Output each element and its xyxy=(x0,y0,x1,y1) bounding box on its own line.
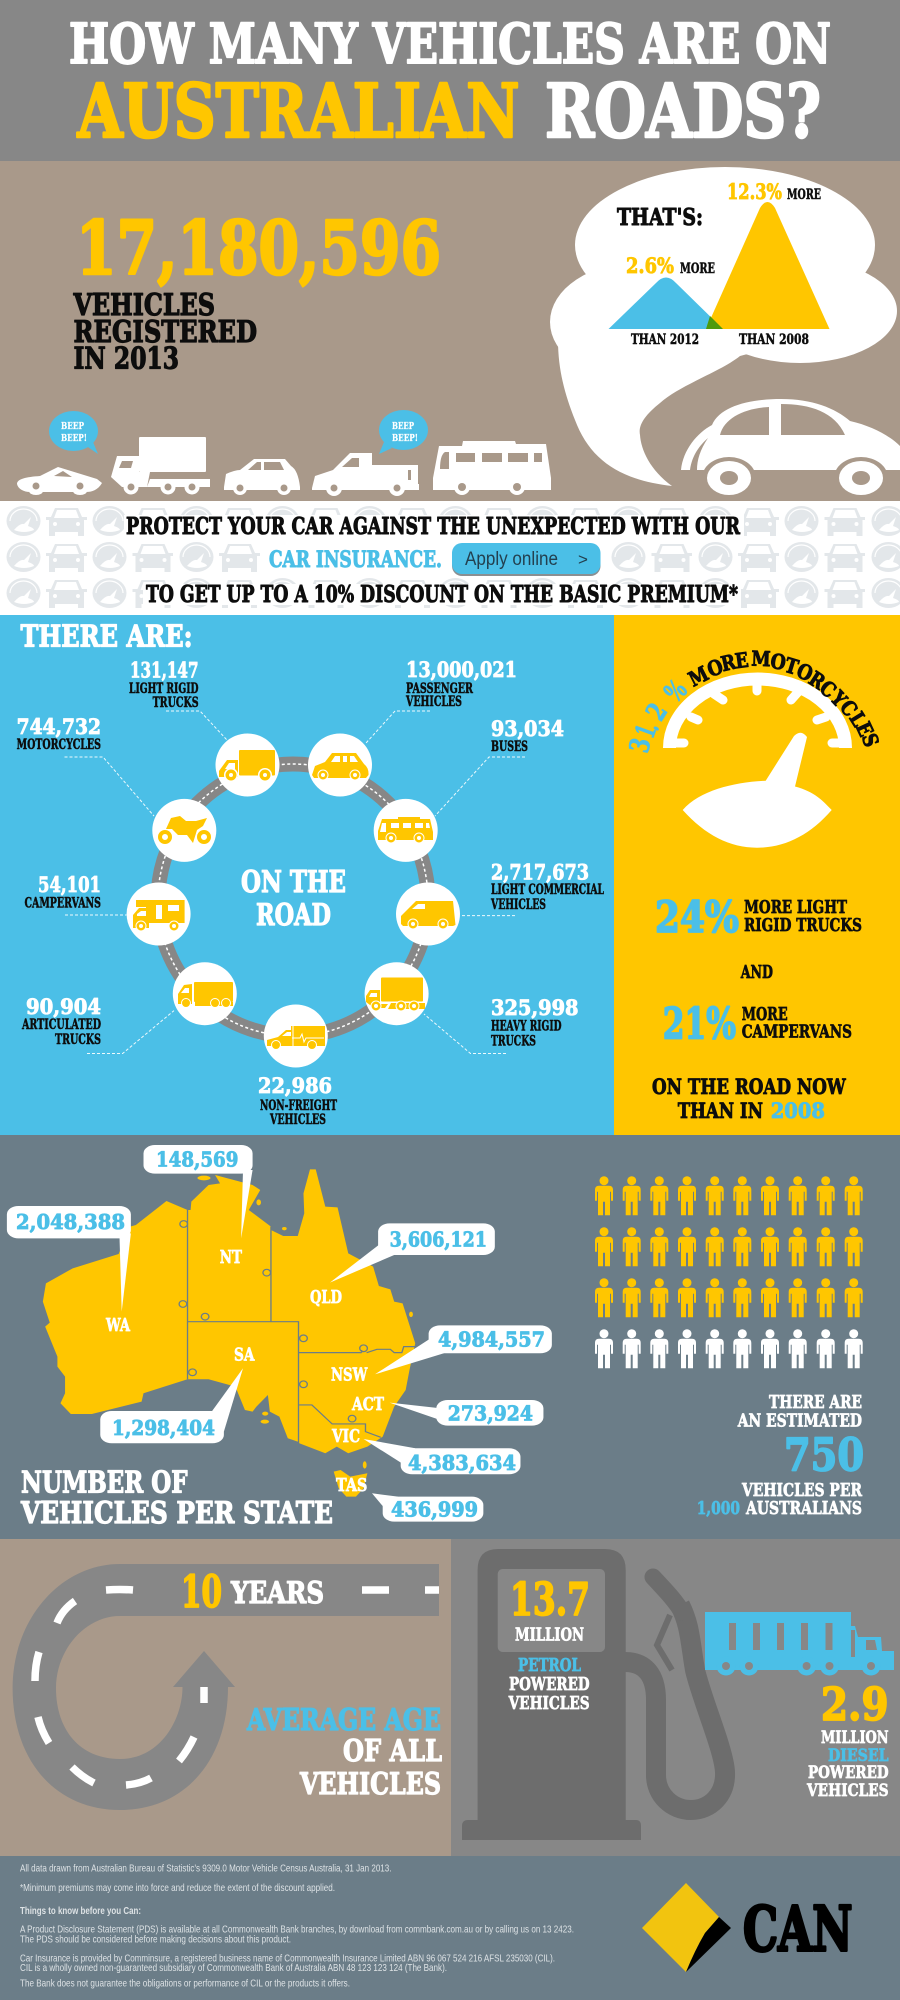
stat: 21% xyxy=(663,1000,852,1050)
big number: 17,180,596 xyxy=(76,206,441,292)
item: campervans: CAMPERVANS xyxy=(24,896,101,912)
heading: THERE ARE: xyxy=(20,620,192,654)
panel: total vehicles registered xyxy=(0,161,900,502)
item: articulated trucks xyxy=(21,962,237,1054)
pictogram: people rows xyxy=(595,1176,863,1368)
stat: 21%: 21% xyxy=(663,1000,736,1050)
2.6% more xyxy=(626,253,715,278)
panel: insurance banner xyxy=(0,501,900,615)
button: apply online: > xyxy=(578,550,588,569)
state labels: WA xyxy=(105,1315,131,1336)
curved headline: . xyxy=(635,716,666,735)
item: heavy rigid trucks: HEAVY RIGID xyxy=(491,1018,562,1034)
stat: 750 per 1,000: VEHICLES PER xyxy=(741,1481,862,1501)
curved headline: 1 xyxy=(630,721,663,742)
logo: CAN xyxy=(642,1883,852,1972)
closing line: THAN IN xyxy=(678,1098,763,1123)
state labels: TAS xyxy=(336,1475,367,1496)
state labels xyxy=(105,1247,384,1496)
curved headline: O xyxy=(793,659,816,687)
item: articulated trucks: ARTICULATED xyxy=(21,1017,101,1033)
ring road xyxy=(158,764,428,1036)
curved headline: S xyxy=(856,731,883,750)
curved headline: M xyxy=(685,662,713,692)
centre label: ROAD xyxy=(256,898,331,933)
average age caption: AVERAGE AGE xyxy=(246,1703,441,1738)
callout: QLD: 3,606,121 xyxy=(390,1228,487,1252)
item: light rigid trucks xyxy=(129,658,280,796)
callout: NT: 148,569 xyxy=(156,1148,238,1172)
state labels: VIC xyxy=(331,1426,360,1447)
caption xyxy=(73,288,257,376)
state labels: ACT xyxy=(351,1394,384,1415)
stat: 21%: CAMPERVANS xyxy=(742,1022,852,1043)
icon: sports car with beep xyxy=(17,411,102,495)
ten years: 10 xyxy=(181,1567,222,1618)
stat: 21%: MORE xyxy=(742,1004,788,1025)
item: light rigid trucks: LIGHT RIGID xyxy=(129,681,199,697)
panel: there are (on the road) xyxy=(0,615,614,1135)
caption: VEHICLES xyxy=(73,288,215,323)
item: heavy rigid trucks xyxy=(365,962,578,1054)
panel: average age xyxy=(0,1539,451,1856)
icon: truck xyxy=(111,437,210,494)
callout: VIC xyxy=(364,1439,520,1475)
12.3% more: MORE xyxy=(787,187,821,203)
axis labels xyxy=(631,332,809,348)
item: passenger vehicles xyxy=(308,657,517,796)
axis labels: THAN 2012 xyxy=(631,332,699,348)
curved headline: 3 xyxy=(623,735,657,756)
item: light rigid trucks: TRUCKS xyxy=(153,695,199,711)
item: buses xyxy=(374,716,564,862)
state labels: SA xyxy=(234,1345,255,1366)
curved headline: C xyxy=(815,676,841,703)
footnotes: The PDS should be considered before making decisions about this product. xyxy=(20,1934,291,1946)
stat: 24%: MORE LIGHT xyxy=(744,897,847,918)
item: light rigid trucks: 131,147 xyxy=(130,658,198,682)
curved headline: Y xyxy=(825,686,851,712)
item: light commercial vehicles: 2,717,673 xyxy=(491,860,589,884)
panel: footer xyxy=(0,1856,900,2000)
item: articulated trucks: 90,904 xyxy=(26,994,101,1019)
centre label xyxy=(241,865,346,933)
diesel stat xyxy=(806,1678,889,1801)
curved headline: O xyxy=(704,655,726,682)
diesel stat: DIESEL xyxy=(828,1746,889,1766)
heading: number of vehicles per state: VEHICLES PER STATE xyxy=(20,1496,333,1531)
footnotes xyxy=(20,1862,574,1990)
stat: 750 per 1,000: AUSTRALIANS xyxy=(745,1499,862,1519)
closing line: ON THE ROAD NOW xyxy=(652,1074,846,1099)
curved headline: T xyxy=(782,654,801,680)
footnotes: Car Insurance is provided by Comminsure, a registered business name of Commonwealth Insurance Limited ABN 96 067 524 216 AFSL 235030 (CIL). xyxy=(20,1952,555,1964)
item: campervans xyxy=(24,872,191,946)
icon: sports car with beep: BEEP! xyxy=(61,433,87,444)
item: buses: BUSES xyxy=(491,739,528,755)
callout: NSW xyxy=(375,1325,552,1374)
ten years: YEARS xyxy=(230,1576,324,1611)
logo: CAN: CAN xyxy=(743,1893,852,1966)
axis labels: THAN 2008 xyxy=(739,332,809,348)
state labels: NT xyxy=(220,1247,242,1268)
map of Australia xyxy=(43,1169,415,1497)
title: AUSTRALIAN xyxy=(77,69,520,155)
triangle chart xyxy=(608,202,830,329)
item: non-freight vehicles: 22,986 xyxy=(258,1073,332,1098)
item: passenger vehicles: 13,000,021 xyxy=(406,657,517,682)
2.6% more: MORE xyxy=(680,261,715,277)
curved headline: % xyxy=(659,674,693,709)
callout: WA xyxy=(7,1206,131,1312)
title xyxy=(69,11,831,155)
closing line xyxy=(652,1074,846,1123)
curved headline: E xyxy=(734,648,750,674)
item: motorcycles xyxy=(17,714,216,862)
stat: 24%: RIGID TRUCKS xyxy=(744,915,862,936)
stat: 750 per 1,000: AN ESTIMATED xyxy=(737,1412,862,1432)
item: light commercial vehicles: LIGHT COMMERCIAL xyxy=(491,882,604,898)
callout: SA: 1,298,404 xyxy=(112,1416,215,1440)
item: motorcycles: 744,732 xyxy=(17,714,101,739)
panel: growth stats xyxy=(614,615,900,1135)
footnotes: A Product Disclosure Statement (PDS) is available at all Commonwealth Bank branches, by download from commbank.com.au or by calling us on 13 2423. xyxy=(20,1924,574,1936)
petrol stat: PETROL xyxy=(518,1655,581,1676)
curved headline: C xyxy=(835,696,862,721)
closing line: 2008 xyxy=(771,1098,825,1123)
ten years xyxy=(181,1567,324,1618)
button: apply online xyxy=(452,543,600,576)
icon: pickup with beep: BEEP xyxy=(392,421,414,432)
2.6% more: 2.6% xyxy=(626,253,674,278)
item: passenger vehicles: VEHICLES xyxy=(405,694,462,710)
stat: 24%: 24% xyxy=(655,893,739,943)
icon: speedometer xyxy=(660,679,860,848)
footnotes: All data drawn from Australian Bureau of Statistic's 9309.0 Motor Vehicle Census Australia, 31 Jan 2013. xyxy=(20,1862,392,1874)
callout: TAS xyxy=(372,1493,483,1522)
car insurance: CAR INSURANCE. xyxy=(269,547,442,573)
centre label: ON THE xyxy=(241,865,346,900)
petrol stat: 13.7 xyxy=(510,1573,590,1626)
panel: vehicles per state xyxy=(0,1135,900,1539)
item: campervans: 54,101 xyxy=(38,872,101,897)
item: heavy rigid trucks: TRUCKS xyxy=(491,1034,536,1050)
callout: NT xyxy=(144,1145,253,1238)
button: apply online: Apply online xyxy=(465,549,558,570)
icon: semi truck xyxy=(705,1612,894,1676)
diesel stat: 2.9 xyxy=(821,1678,889,1731)
exhaust cloud with comparison chart xyxy=(550,167,897,486)
callout: SA xyxy=(100,1368,243,1443)
footnotes: Things to know before you Can: xyxy=(20,1905,141,1917)
heading: number of vehicles per state xyxy=(20,1466,333,1531)
caption: IN 2013 xyxy=(74,342,179,376)
that's label: THAT'S: xyxy=(617,204,703,231)
icon: pickup with beep: BEEP! xyxy=(392,433,418,444)
and: AND xyxy=(740,962,773,983)
panel: fuel types xyxy=(451,1539,900,1856)
curved headline: M xyxy=(751,647,771,672)
icon: sports car with beep: BEEP xyxy=(61,421,84,432)
callout: WA: 2,048,388 xyxy=(16,1210,125,1234)
callout: ACT: 273,924 xyxy=(448,1402,533,1426)
stat: 24% xyxy=(655,893,862,943)
caption: REGISTERED xyxy=(74,315,257,350)
heading: number of vehicles per state: NUMBER OF xyxy=(21,1466,188,1501)
curved headline: R xyxy=(804,667,829,695)
state labels: NSW xyxy=(331,1365,368,1386)
curved headline: 2 xyxy=(640,698,674,726)
12.3% more: 12.3% xyxy=(727,179,782,204)
title: ROADS? xyxy=(545,69,821,155)
footnotes: CIL is a wholly owned non-guaranteed subsidiary of Commonwealth Bank of Australia ABN 48 123 123 124 (The Bank). xyxy=(20,1962,447,1974)
footnotes: The Bank does not guarantee the obligations or performance of CIL or the products it offers. xyxy=(20,1978,350,1990)
curved headline: R xyxy=(719,650,738,677)
icon: bus xyxy=(433,441,551,495)
item: non-freight vehicles: NON-FREIGHT xyxy=(260,1098,337,1114)
item: passenger vehicles: PASSENGER xyxy=(406,681,474,697)
icon: winding road arrow xyxy=(13,1564,439,1810)
average age caption xyxy=(246,1703,442,1802)
item: articulated trucks: TRUCKS xyxy=(55,1032,101,1048)
curved headline: L xyxy=(844,708,871,731)
curved headline: E xyxy=(851,718,878,740)
callout: NSW: 4,984,557 xyxy=(438,1328,545,1352)
stat: 750 per 1,000: THERE ARE xyxy=(769,1393,862,1413)
petrol stat: POWERED xyxy=(509,1674,590,1695)
icon: hatchback xyxy=(224,459,300,495)
item: non-freight vehicles xyxy=(258,1004,337,1128)
average age caption: OF ALL xyxy=(343,1734,442,1769)
curved headline xyxy=(623,647,883,756)
average age caption: VEHICLES xyxy=(299,1767,441,1802)
panel: header xyxy=(0,0,900,161)
icon: large car xyxy=(681,399,900,502)
icon: fuel pump xyxy=(462,1549,725,1840)
item: motorcycles: MOTORCYCLES xyxy=(17,737,101,753)
icon: pickup with beep xyxy=(312,410,428,496)
footnotes: *Minimum premiums may come into force and reduce the extent of the discount applied. xyxy=(20,1882,335,1894)
stat: 750 per 1,000: 750 xyxy=(784,1429,864,1482)
callout: QLD xyxy=(330,1223,495,1283)
item: light commercial vehicles: VEHICLES xyxy=(490,897,546,913)
item: heavy rigid trucks: 325,998 xyxy=(491,995,578,1020)
callout: ACT xyxy=(390,1400,543,1426)
stat: 750 per 1,000 xyxy=(697,1393,864,1519)
state labels: QLD xyxy=(310,1287,342,1308)
item: buses: 93,034 xyxy=(491,716,564,741)
item: non-freight vehicles: VEHICLES xyxy=(269,1112,326,1128)
curved headline: O xyxy=(769,649,788,675)
petrol stat xyxy=(508,1573,590,1714)
petrol stat: MILLION xyxy=(515,1625,584,1646)
callout: TAS: 436,999 xyxy=(391,1498,478,1522)
item: light commercial vehicles xyxy=(396,860,604,946)
stat: 750 per 1,000: 1,000 xyxy=(697,1499,740,1519)
callout: VIC: 4,383,634 xyxy=(408,1451,516,1475)
petrol stat: VEHICLES xyxy=(508,1693,590,1714)
